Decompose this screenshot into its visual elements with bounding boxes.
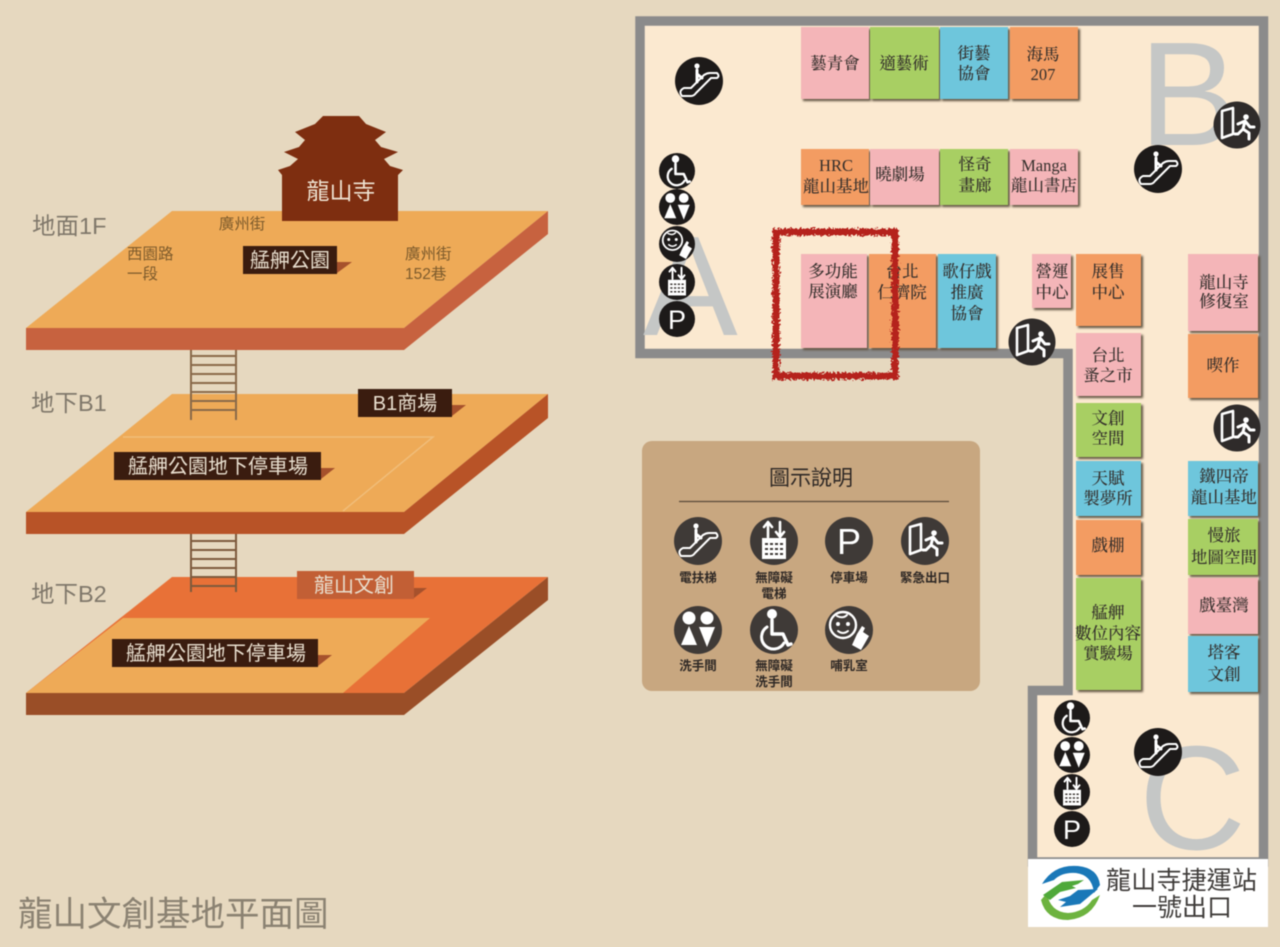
title: 龍山文創基地平面圖 <box>18 896 328 934</box>
shop: 艋舺數位內容實驗場: 數位內容 <box>1075 624 1141 643</box>
legend item: restroom <box>674 606 722 673</box>
legend item: accessible elevator: 無障礙 <box>755 570 793 585</box>
icon: escalator A <box>675 57 723 105</box>
shop: 艋舺數位內容實驗場: 艋舺 <box>1092 603 1124 622</box>
legend item: parking <box>825 517 873 585</box>
shop: 塔客文創: 文創 <box>1208 665 1240 684</box>
shop: 台北蚤之市: 蚤之市 <box>1083 366 1133 385</box>
shop: Manga <box>1010 149 1078 205</box>
legend item: nursing room <box>825 606 873 673</box>
icons: zone C facilities: P <box>1063 815 1081 845</box>
label: Longshan Creative <box>297 571 427 599</box>
shop: HRC: HRC <box>819 156 853 175</box>
shop: 歌仔戲推廣協會: 推廣 <box>950 283 985 302</box>
red highlight frame <box>776 232 895 376</box>
floor plate: basement B2 <box>26 577 548 715</box>
shop: 台北蚤之市: 台北 <box>1092 346 1124 365</box>
shop: 慢旅地圖空間: 地圖空間 <box>1191 548 1257 567</box>
shop: 戲臺灣 <box>1188 578 1258 634</box>
legend item: accessible elevator: 電梯 <box>761 586 787 601</box>
legend item: accessible elevator <box>750 517 798 601</box>
icon: exit B <box>1214 102 1260 148</box>
shop: 適藝術: 適藝術 <box>879 54 929 73</box>
zone letter B: B <box>1139 12 1238 177</box>
shop: 戲棚 <box>1076 520 1141 575</box>
label: B1 mall <box>358 389 466 417</box>
shop: 鐵四帝龍山基地: 鐵四帝 <box>1199 467 1249 486</box>
shop: 海馬207: 207 <box>1031 65 1055 84</box>
shop: 營運中心 <box>1032 254 1071 308</box>
MRT exit sign <box>1028 859 1268 927</box>
icon: escalator B <box>1134 145 1182 193</box>
legend item: parking: 停車場 <box>830 570 868 585</box>
legend item: parking: P <box>837 521 861 562</box>
shop: 海馬207: 海馬 <box>1026 45 1060 64</box>
shop: 慢旅地圖空間 <box>1188 519 1258 575</box>
shop: 龍山寺修復室: 龍山寺 <box>1199 273 1249 292</box>
shop: 營運中心: 中心 <box>1036 283 1070 302</box>
shop: 戲棚: 戲棚 <box>1092 536 1124 555</box>
shop: 艋舺數位內容實驗場: 實驗場 <box>1083 644 1133 663</box>
label: Longshan Creative: 龍山文創 <box>314 574 394 597</box>
floor labels: 地面1F <box>32 213 106 239</box>
ladder overlay on B1 <box>191 394 236 420</box>
road labels on 1F: 廣州街 <box>219 215 265 233</box>
shop: 鐵四帝龍山基地: 龍山基地 <box>1191 488 1257 507</box>
shop: 怪奇畫廊: 怪奇 <box>958 155 992 174</box>
label: B1 parking: 艋舺公園地下停車場 <box>128 455 308 478</box>
icon: exit right <box>1214 404 1260 452</box>
label: Bangka Park <box>243 246 352 274</box>
icon: Longshan Temple building: 龍山寺 <box>306 178 376 204</box>
floor plan outline <box>640 21 1264 862</box>
shop: 文創空間: 空間 <box>1092 429 1124 448</box>
shop: 展售中心 <box>1076 254 1141 326</box>
road labels on 1F: 西園路 <box>127 245 174 263</box>
shop: 塔客文創: 塔客 <box>1208 643 1240 662</box>
shop: 台北蚤之市 <box>1076 333 1141 396</box>
shop: 台北仁濟院: 台北 <box>886 262 918 281</box>
shop: 多功能展演廳 <box>801 254 867 348</box>
shop: 喫作 <box>1188 334 1258 398</box>
shop: HRC: 龍山基地 <box>803 177 869 196</box>
shop: 怪奇畫廊 <box>940 149 1008 205</box>
ladder between 1F and B1 <box>191 350 236 420</box>
shop: 多功能展演廳: 多功能 <box>808 262 858 281</box>
legend item: emergency exit: 緊急出口 <box>900 570 950 585</box>
label: B2 parking <box>112 639 332 667</box>
shop: 台北仁濟院 <box>869 254 936 348</box>
legend item: accessible restroom: 洗手間 <box>755 674 793 689</box>
legend item: escalator: 電扶梯 <box>679 570 717 585</box>
shop: 歌仔戲推廣協會 <box>938 254 996 348</box>
icons: zone C facilities <box>1054 700 1090 847</box>
shop: 歌仔戲推廣協會: 協會 <box>950 304 984 323</box>
shop: HRC <box>801 149 869 205</box>
shop: 街藝協會: 街藝 <box>958 44 990 63</box>
zone letter C: C <box>1139 716 1246 881</box>
legend heading: 圖示說明 <box>769 467 853 490</box>
floor labels <box>31 213 107 607</box>
legend item: accessible restroom: 無障礙 <box>755 658 793 673</box>
icon: escalator C <box>1134 728 1182 776</box>
label: B2 parking: 艋舺公園地下停車場 <box>126 642 306 665</box>
label: B1 parking <box>114 452 335 480</box>
shop: 台北仁濟院: 仁濟院 <box>877 282 927 302</box>
icons: zone A facilities <box>659 153 695 337</box>
floor labels: 地下B1 <box>31 390 107 416</box>
icon: Longshan Temple building <box>278 116 403 221</box>
shop: 曉劇場 <box>870 149 939 205</box>
shop: 龍山寺修復室: 修復室 <box>1199 292 1249 311</box>
shop: Manga: Manga <box>1021 156 1068 175</box>
shop: 怪奇畫廊: 畫廊 <box>958 176 992 195</box>
shop: 營運中心: 營運 <box>1036 262 1068 281</box>
shop: 展售中心: 中心 <box>1092 283 1126 302</box>
road labels on 1F: 一段 <box>127 265 158 283</box>
road labels on 1F: 廣州街 <box>405 245 452 263</box>
icon: exit centre <box>1008 318 1056 366</box>
MRT exit sign: 一號出口 <box>1132 894 1232 922</box>
road labels on 1F: 152巷 <box>405 265 447 283</box>
legend item: escalator <box>674 517 722 585</box>
zone letter A: A <box>643 207 738 366</box>
ladder between B1 and B2 <box>191 534 236 592</box>
floor labels: 地下B2 <box>31 581 107 607</box>
MRT exit sign: 龍山寺捷運站 <box>1106 867 1257 895</box>
legend item: nursing room: 哺乳室 <box>830 658 868 673</box>
legend item: restroom: 洗手間 <box>679 658 717 673</box>
shop: 適藝術 <box>870 27 939 99</box>
shop: 艋舺數位內容實驗場 <box>1075 578 1141 690</box>
shop: 街藝協會: 協會 <box>958 64 990 83</box>
shop: 展售中心: 展售 <box>1092 261 1124 281</box>
shop: 塔客文創 <box>1188 636 1258 692</box>
shop: 文創空間: 文創 <box>1092 409 1124 428</box>
shop: 海馬207 <box>1010 27 1078 99</box>
shop: 曉劇場: 曉劇場 <box>875 165 925 184</box>
label: Bangka Park: 艋舺公園 <box>250 249 330 272</box>
shop: 喫作: 喫作 <box>1206 356 1240 375</box>
shop: 多功能展演廳: 展演廳 <box>808 282 858 301</box>
shop: 藝青會: 藝青會 <box>810 54 860 73</box>
icons: zone A facilities: P <box>668 305 686 335</box>
shop: 鐵四帝龍山基地 <box>1188 461 1258 516</box>
shop: 藝青會 <box>801 27 869 99</box>
road labels on 1F <box>127 215 452 283</box>
shop: 天賦製夢所: 製夢所 <box>1083 488 1133 508</box>
shop: 天賦製夢所 <box>1076 461 1141 516</box>
shop: 街藝協會 <box>940 27 1008 99</box>
shop: 天賦製夢所: 天賦 <box>1092 469 1125 488</box>
floor plate: ground 1F <box>26 211 548 350</box>
shop: 慢旅地圖空間: 慢旅 <box>1208 526 1241 545</box>
shop: 龍山寺修復室 <box>1188 254 1258 331</box>
panel: legend <box>642 441 980 691</box>
shop: Manga: 龍山書店 <box>1011 176 1077 195</box>
legend item: accessible restroom <box>750 606 798 689</box>
label: B1 mall: B1商場 <box>373 392 437 415</box>
shop: 文創空間 <box>1076 403 1141 457</box>
shop: 歌仔戲推廣協會: 歌仔戲 <box>942 262 992 281</box>
shop: 戲臺灣: 戲臺灣 <box>1199 596 1249 615</box>
floor plate: basement B1 <box>26 394 548 534</box>
legend item: emergency exit <box>900 517 950 585</box>
